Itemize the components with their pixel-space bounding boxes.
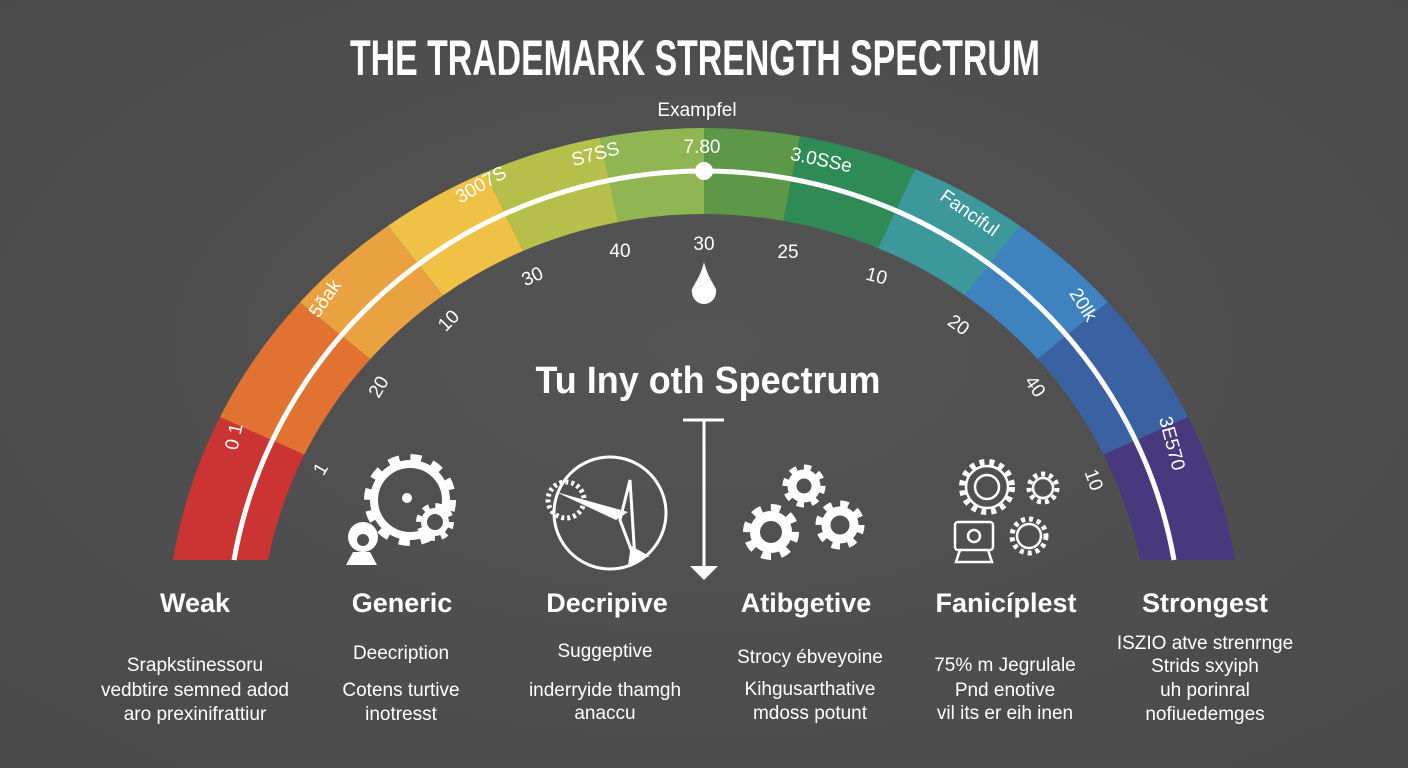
column descriptions [101,633,1293,725]
title: THE TRADEMARK STRENGTH SPECTRUM [350,30,1040,86]
icon: fanciful gears and monitor [955,462,1057,562]
column descriptions: Srapkstinessoru [127,655,263,676]
tick numbers: 30 [693,234,715,255]
column descriptions: vil its er eih inen [937,703,1073,724]
tick numbers: 20 [365,373,394,402]
tick numbers: 40 [1020,372,1049,402]
icon: drop pointer [692,262,716,304]
arc labels: S7SS [569,138,622,171]
arc labels: Fanciful [936,186,1002,241]
icon: generic gears [346,458,452,565]
tick numbers: 40 [609,241,631,262]
tick numbers: 10 [863,264,889,290]
tick numbers: 30 [519,263,547,291]
tick numbers: 25 [777,242,799,263]
column labels: Weak [160,588,231,618]
arc labels: 0 1 [222,422,248,452]
spectrum arc [173,128,1235,560]
tick numbers: 1 [309,459,333,479]
column descriptions: Strocy ébveyoine [737,647,883,668]
arc labels: 3.0SSe [788,144,854,177]
arc labels: 7.80 [684,137,720,158]
column descriptions: Deecription [353,643,449,664]
column descriptions: Pnd enotive [955,680,1055,701]
arc marker dot [695,162,713,180]
column labels [160,588,1268,618]
column labels: Decripive [546,588,668,618]
tick numbers [309,234,1107,494]
column descriptions: aro prexinifrattiur [124,704,267,725]
column descriptions: Suggeptive [557,641,653,662]
column descriptions: uh porinral [1160,680,1250,701]
column descriptions: Kihgusarthative [745,679,875,700]
column descriptions: anaccu [574,703,636,724]
column descriptions: Strids sxyiph [1151,656,1259,677]
arc label: example: Exampfel [657,100,737,121]
tick numbers: 10 [1080,467,1107,494]
column descriptions: mdoss potunt [753,703,868,724]
column descriptions: vedbtire semned adod [101,680,289,701]
arc labels: 3007S [452,162,510,208]
column labels: Generic [352,588,452,618]
arc labels: 3E570 [1154,414,1189,473]
column descriptions: Cotens turtive [342,680,460,701]
column descriptions: nofiuedemges [1145,704,1265,725]
arc labels [222,137,1189,473]
column descriptions: inderryide thamgh [529,680,681,701]
subtitle: Tu Iny oth Spectrum [536,360,880,402]
column descriptions: 75% m Jegrulale [934,655,1076,676]
arrow [683,420,724,580]
arc labels: 20lk [1065,285,1101,326]
column descriptions: ISZIO atve strenrnge [1117,633,1293,654]
arc labels: 5ðak [305,276,346,322]
column descriptions: inotresst [365,704,438,725]
column labels: Atibgetive [741,588,871,618]
icon: descriptive dial [548,457,666,569]
tick numbers: 10 [434,306,464,336]
column labels: Strongest [1142,588,1268,618]
column labels: Fanicíplest [935,588,1077,618]
icon: arbitrary gears [747,468,861,556]
tick numbers: 20 [943,311,973,340]
